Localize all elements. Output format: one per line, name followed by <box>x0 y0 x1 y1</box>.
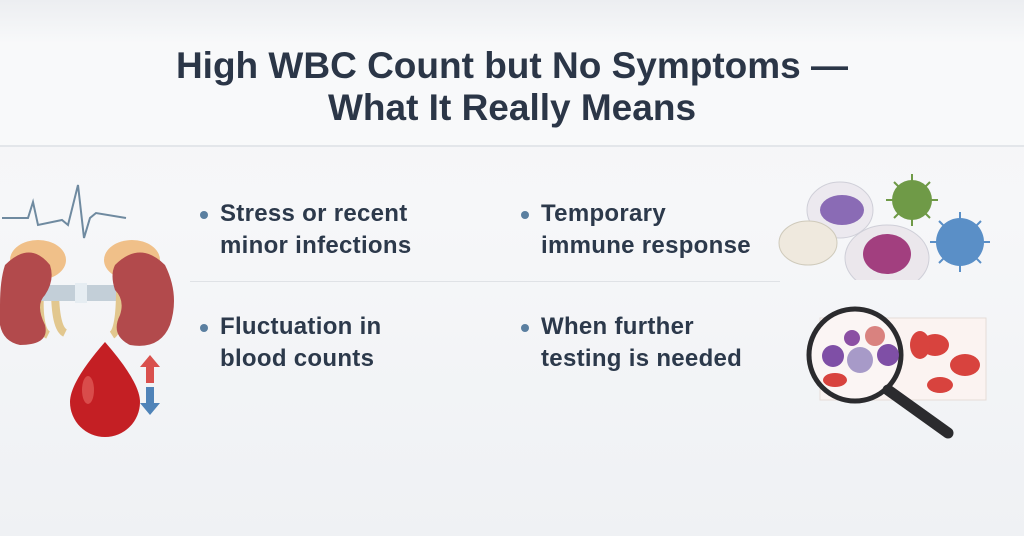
bullet: stress: minor infections <box>220 232 411 259</box>
bullet: temporary <box>521 200 751 259</box>
bullet: further testing: testing is needed <box>541 345 742 372</box>
icon: magnifier over blood smear <box>806 306 986 438</box>
title <box>176 45 848 128</box>
bullet: stress: Stress or recent <box>220 200 408 227</box>
icon: kidneys, heartbeat, blood drop <box>0 184 174 437</box>
bullet: fluctuation <box>200 313 382 372</box>
bullet: further testing <box>521 313 742 372</box>
bullet: further testing: When further <box>541 313 694 340</box>
title: What It Really Means <box>328 87 696 128</box>
bullet: fluctuation: Fluctuation in <box>220 313 382 340</box>
bullet: stress <box>200 200 411 259</box>
title: High WBC Count but No Symptoms — <box>176 45 848 86</box>
icon: immune cells and viruses <box>778 174 990 280</box>
bullet: temporary: Temporary <box>541 200 666 227</box>
bullet: temporary: immune response <box>541 232 751 259</box>
header band <box>0 0 1024 147</box>
bullet: fluctuation: blood counts <box>220 345 374 372</box>
